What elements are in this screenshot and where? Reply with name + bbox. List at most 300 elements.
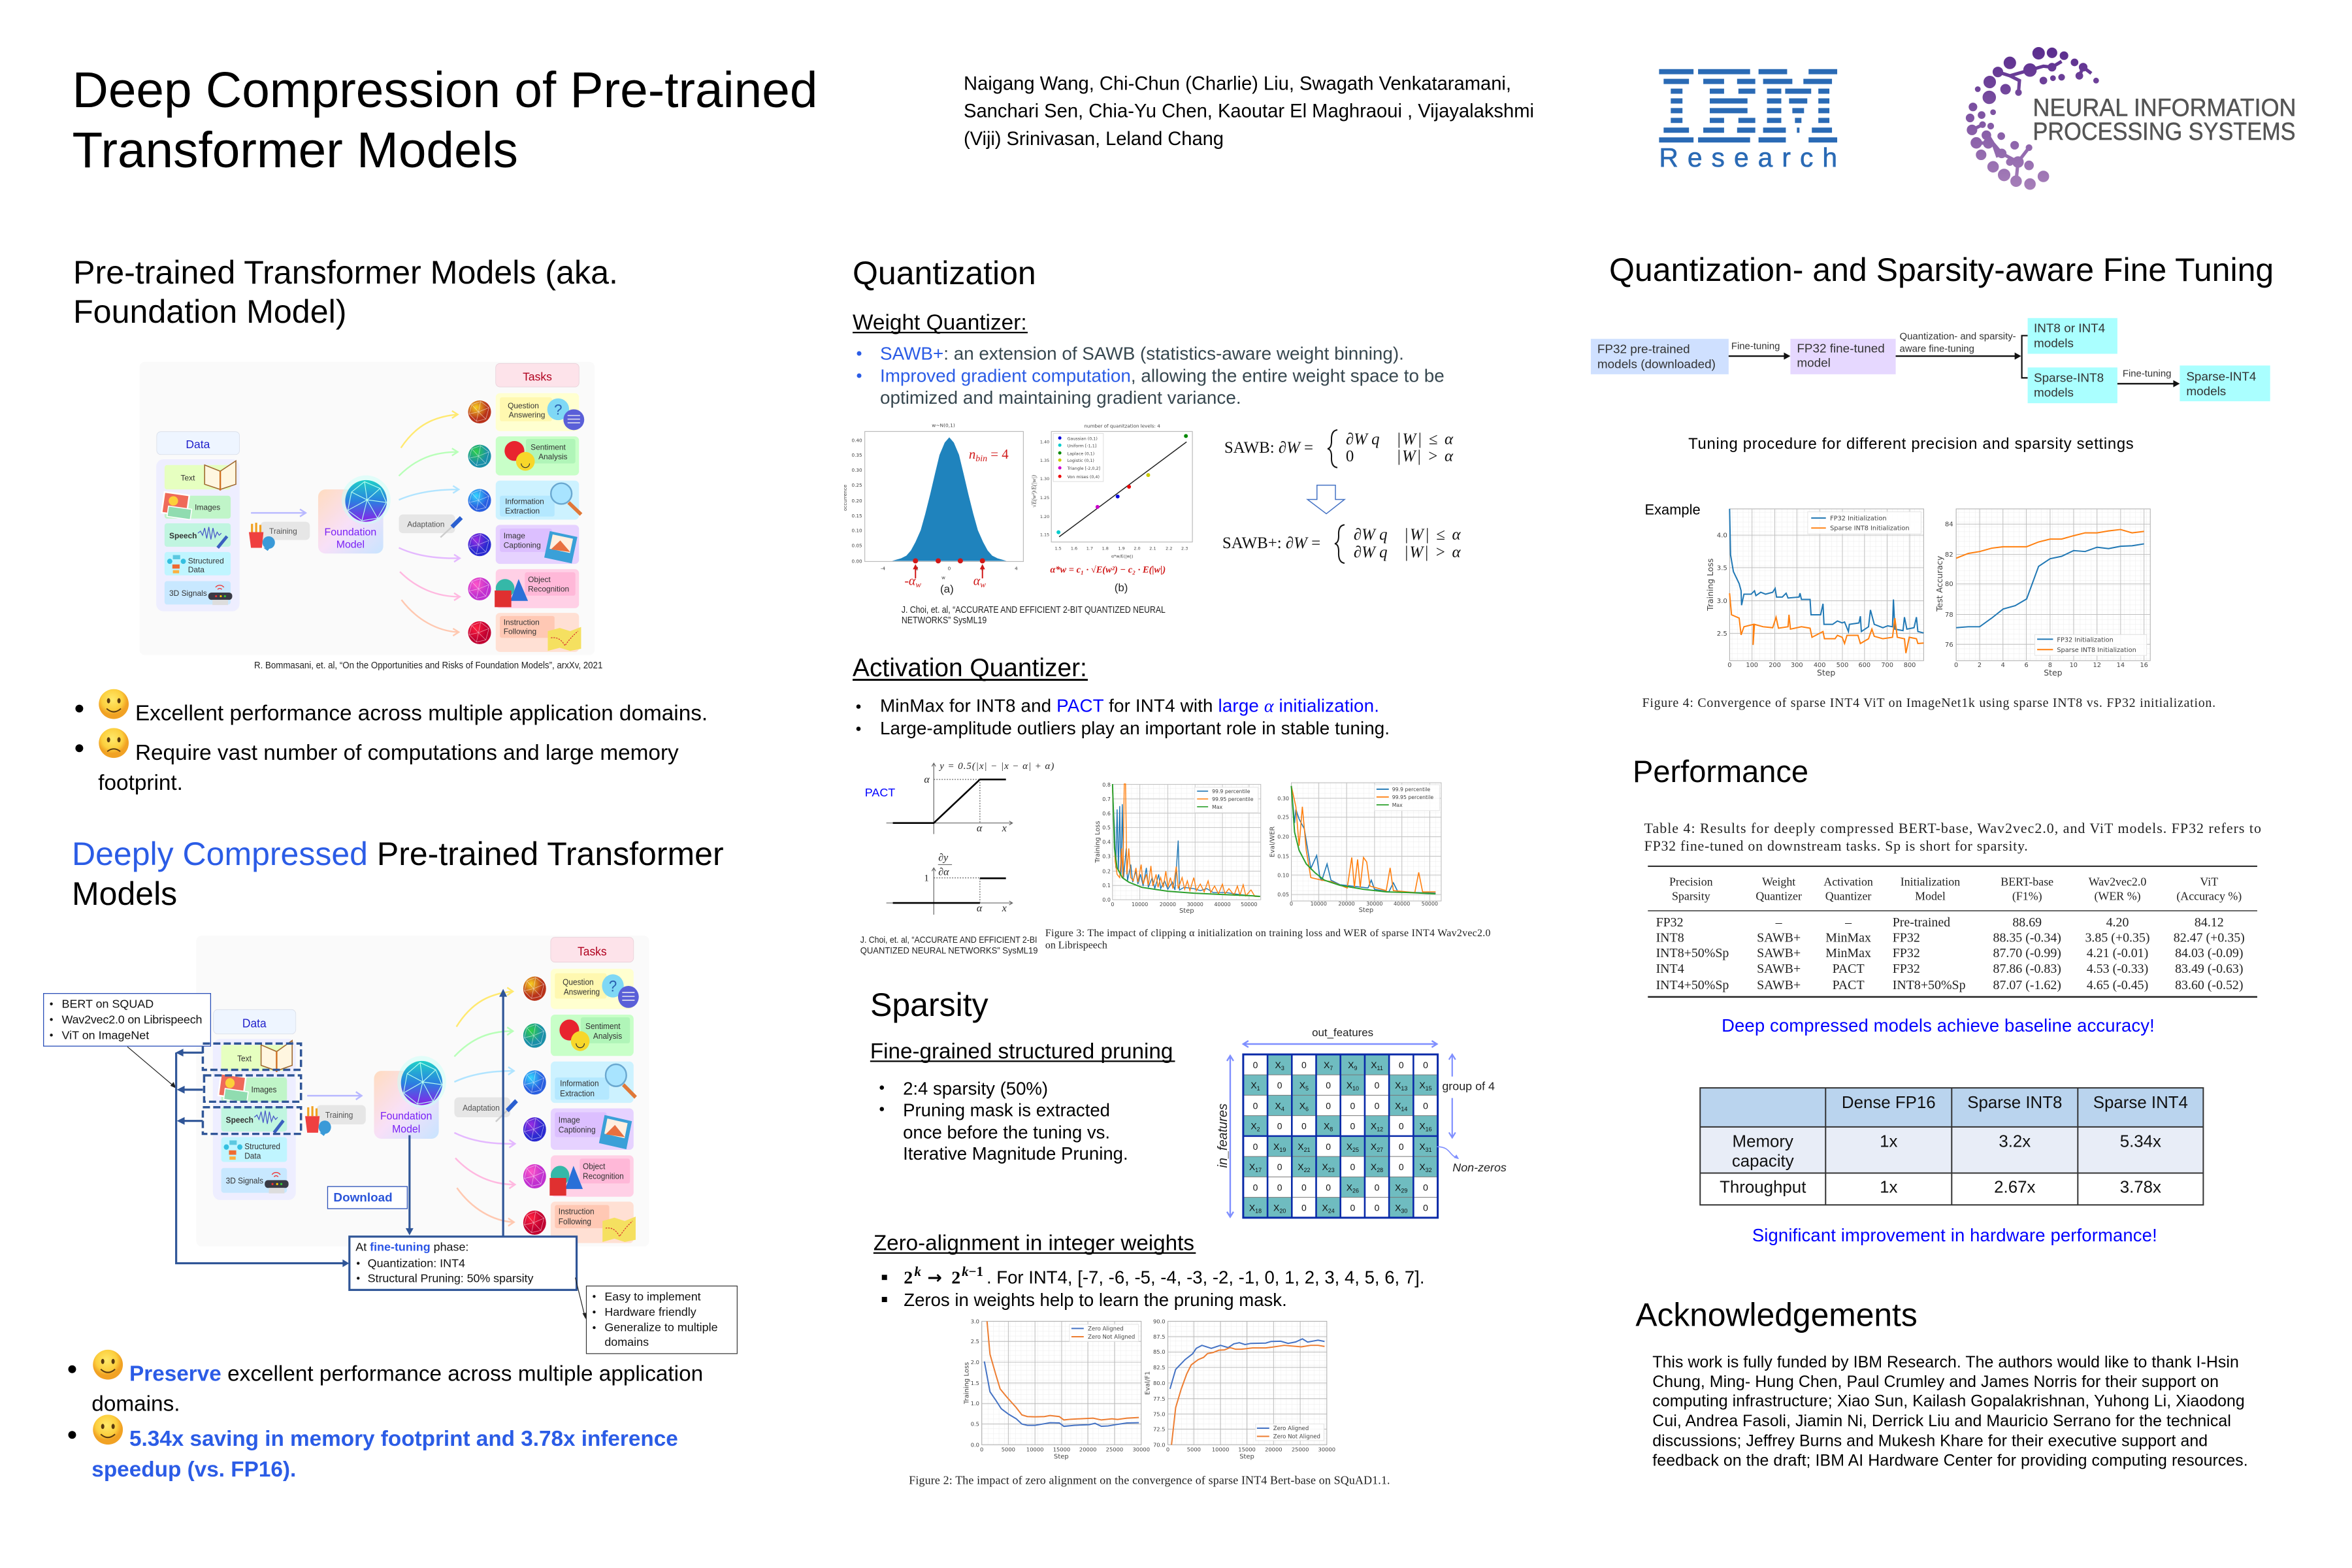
diagram: sparsity matrix: 23 (1328, 1167, 1335, 1173)
diagram: sparsity matrix: X (1250, 1121, 1257, 1132)
diagram: sparsity matrix: 21 (1304, 1147, 1311, 1153)
table: accuracy results: MinMax (1825, 946, 1871, 960)
table: accuracy results: (WER %) (2094, 890, 2141, 904)
table: accuracy results: BERT-base (2001, 875, 2053, 889)
chart: training loss vs step (clipping): 50000 (1241, 902, 1257, 907)
callout: datasets: ViT on ImageNet (62, 1028, 149, 1041)
data column: Images (252, 1085, 276, 1094)
arrow: fine-tuning: Fine-tuning (1731, 341, 1780, 352)
chart: training loss fine tuning: 400 (1814, 662, 1825, 669)
chart: training loss vs step (clipping): 0.2 (1102, 868, 1111, 874)
diagram: sparsity matrix: X (1324, 1121, 1330, 1132)
tasks column: ? (554, 401, 563, 417)
box: sparse INT8 (2028, 367, 2117, 403)
diagram: sparsity matrix: 0 (1253, 1141, 1258, 1152)
table: accuracy results: ViT (2200, 875, 2218, 889)
table: accuracy results: INT8+50%Sp (1656, 946, 1729, 960)
diagram: sparsity matrix: 16 (1426, 1126, 1432, 1133)
chart: weight histogram: 0.30 (851, 467, 862, 473)
tasks column: Extraction (505, 506, 540, 515)
chart: training loss vs step (clipping): 0.7 (1102, 796, 1111, 802)
table: accuracy results: Pre-trained (1893, 915, 1950, 930)
heading: pre-trained transformer models: Pre-trained Transformer Models (aka. (73, 254, 618, 291)
chart: test accuracy fine tuning: 2 (1978, 662, 1982, 669)
task spheres (468, 400, 491, 644)
chart: weight histogram: w (941, 574, 945, 580)
diagram: sparsity matrix: 22 (1304, 1167, 1311, 1173)
data column: Text (237, 1054, 252, 1064)
caption: table 4: FP32 fine-tuned on downstream tasks. Sp is short for sparsity. (1644, 838, 2028, 854)
chart: test accuracy fine tuning: FP32 Initialization (2057, 636, 2114, 644)
data column: Structured (244, 1142, 280, 1151)
diagram: sparsity matrix: 0 (1253, 1182, 1258, 1192)
arrows: fine-tuning flow (176, 989, 507, 1267)
foundation model block: Model (392, 1123, 420, 1135)
tasks column: Analysis (593, 1032, 622, 1041)
equation: SAWB+: |W| ≤ α (1404, 526, 1461, 544)
table: accuracy results: 4.53 (-0.33) (2087, 962, 2148, 976)
tasks column: Answering (564, 987, 600, 997)
caption: figure 3: on Librispeech (1045, 940, 1107, 951)
chart: eval F1 zero alignment: 25000 (1292, 1446, 1309, 1452)
chart: weight histogram: w (915, 580, 921, 589)
chart: eval WER vs step (clipping): 10000 (1311, 901, 1327, 907)
authors: (Viji) Srinivasan, Leland Chang (964, 129, 1224, 150)
tasks column: Image (504, 531, 525, 540)
table: accuracy results: FP32 (1656, 915, 1684, 930)
chart: training loss fine tuning: 600 (1859, 662, 1870, 669)
table: accuracy results: – (1844, 915, 1852, 930)
chart: alpha scatter: Triangle [-2,0,2] (1067, 466, 1100, 471)
arrow: fine-tuning to benefits (576, 1277, 587, 1319)
heading: pre-trained transformer models: Foundation Model) (73, 293, 346, 330)
data column: Data (188, 565, 204, 574)
chart: training loss fine tuning: FP32 Initialization (1830, 515, 1887, 522)
callout: datasets (44, 994, 210, 1046)
chart: training loss zero alignment: 5000 (1002, 1446, 1015, 1452)
chart: alpha scatter: √E(w²)/E(|w|) (1030, 475, 1037, 508)
chart: training loss zero alignment: Zero Not Aligned (1088, 1334, 1135, 1341)
chart: alpha scatter: α*w = c₁ · √E(w²) − c₂ · E(|w|) (1050, 564, 1166, 575)
diagram: PACT activation: PACT (865, 786, 895, 799)
equation: SAWB (1224, 430, 1454, 468)
tasks column: Information (560, 1079, 599, 1088)
box: FP32 pre-trained: models (downloaded) (1597, 357, 1716, 371)
chart: weight histogram: 0.25 (851, 482, 862, 488)
subheading: weight quantizer: Weight Quantizer: (853, 311, 1027, 335)
chart: training loss fine tuning: 2.5 (1717, 630, 1727, 638)
chart: eval F1 zero alignment: 72.5 (1153, 1426, 1166, 1433)
diagram: sparsity matrix: 0 (1375, 1100, 1380, 1111)
chart: eval WER vs step (clipping): 0.30 (1277, 796, 1289, 802)
chart: eval WER vs step (clipping) (1269, 783, 1441, 914)
diagram: sparsity matrix: X (1371, 1121, 1377, 1132)
diagram: sparsity matrix: X (1322, 1203, 1328, 1213)
callout: datasets: Wav2vec2.0 on Librispeech (62, 1013, 202, 1026)
text: zero-alignment bullets: . For INT4, [-7, -6, -5, -4, -3, -2, -1, 0, 1, 2, 3, 4, 5, 6, 7]. (987, 1267, 1425, 1288)
diagram: sparsity matrix: X (1371, 1060, 1377, 1070)
arrow: SAWB to SAWB+ (1307, 485, 1345, 514)
chart: eval F1 zero alignment: Zero Aligned (1273, 1426, 1309, 1432)
text: zero-alignment bullets: → (927, 1268, 942, 1288)
diagram: sparsity matrix: X (1348, 1060, 1354, 1070)
chart: alpha scatter: Logistic (0,1) (1068, 459, 1094, 463)
chart: eval F1 zero alignment: 30000 (1318, 1446, 1335, 1452)
chart: eval WER vs step (clipping): 0.10 (1277, 872, 1289, 878)
chart: training loss fine tuning: 500 (1837, 662, 1848, 669)
chart: training loss fine tuning: 100 (1746, 662, 1758, 669)
chart: training loss fine tuning: 200 (1769, 662, 1781, 669)
box: INT8 or INT4: INT8 or INT4 (2034, 322, 2105, 336)
diagram: sparsity matrix: 0 (1350, 1100, 1355, 1111)
diagram: sparsity matrix: 0 (1253, 1100, 1258, 1111)
table: hardware performance: 3.78x (2120, 1178, 2161, 1196)
adaptation step: Adaptation (463, 1103, 500, 1113)
foundation model block: Foundation (380, 1110, 432, 1122)
citation: Choi PACT: QUANTIZED NEURAL NETWORKS” SysML19 (860, 945, 1038, 956)
tasks column: Information (505, 497, 544, 506)
chart: training loss fine tuning: Step (1817, 668, 1835, 678)
diagram: sparsity matrix: X (1322, 1162, 1328, 1172)
arrow: quantization and sparsity tuning (1896, 331, 2028, 378)
callout: hardware improvement: Significant improvement in hardware performance! (1752, 1225, 2157, 1245)
tasks column: Answering (509, 410, 545, 419)
chart: training loss vs step (clipping): 0.5 (1102, 825, 1111, 831)
citation: Choi SAWB: J. Choi, et. al, “ACCURATE AND EFFICIENT 2-BIT QUANTIZED NEURAL (902, 604, 1166, 615)
diagram: sparsity matrix: 0 (1350, 1203, 1355, 1213)
chart: eval WER vs step (clipping): 40000 (1394, 901, 1410, 907)
chart: training loss vs step (clipping) (1094, 782, 1261, 915)
diagram: sparsity matrix: X (1273, 1141, 1279, 1152)
diagram: sparsity matrix: 27 (1377, 1147, 1383, 1153)
diagram: sparsity matrix: X (1419, 1141, 1426, 1152)
table: accuracy results: 4.21 (-0.01) (2087, 946, 2148, 960)
chart: test accuracy fine tuning: 12 (2093, 662, 2101, 669)
table: accuracy results: (Accuracy %) (2176, 890, 2242, 904)
text: pruning bullets: 2:4 sparsity (50%) (903, 1079, 1048, 1099)
chart: weight histogram: 2 (981, 565, 984, 571)
diagram: PACT activation: x (1002, 823, 1007, 834)
diagram: sparsity matrix: 0 (1423, 1203, 1428, 1213)
table: hardware performance: Sparse INT8 (1967, 1094, 2062, 1112)
chart: eval F1 zero alignment: 82.5 (1153, 1364, 1166, 1371)
chart: eval WER vs step (clipping): Eval/WER (1269, 826, 1277, 857)
text: acknowledgements: Cui, Andrea Fasoli, Jiamin Ni, Derrick Liu and Mauricio Serrano for the technical (1652, 1412, 2231, 1430)
chart: weight histogram: 0.15 (851, 513, 862, 519)
caption: table 4: Table 4: Results for deeply compressed BERT-base, Wav2vec2.0, and ViT models. FP32 refers to (1644, 820, 2261, 836)
table: accuracy results: FP32 (1893, 930, 1920, 945)
heading: deeply compressed models (72, 836, 724, 912)
chart: alpha scatter: 1.35 (1040, 458, 1049, 463)
diagram: sparsity matrix: 0 (1423, 1100, 1428, 1111)
training step: Training (269, 527, 297, 536)
tasks column: Following (504, 627, 536, 636)
logo: Neural Information Processing Systems (1967, 48, 2296, 189)
bullet: require vast computations (75, 728, 679, 795)
tasks column: Tasks (578, 945, 607, 958)
table: hardware performance: 2.67x (1994, 1178, 2036, 1196)
caption: figure 3: Figure 3: The impact of clipping α initialization on training loss and WER of sparse INT4 Wav2vec2.0 (1045, 928, 1491, 939)
callout: benefits: Generalize to multiple (604, 1321, 718, 1334)
chart: training loss vs step (clipping): Max (1212, 804, 1223, 810)
table: accuracy results: INT4 (1656, 962, 1684, 976)
table: accuracy results: INT8 (1656, 930, 1684, 945)
box: INT8 or INT4: models (2034, 337, 2074, 351)
caption: figure 3 (1045, 928, 1491, 951)
diagram: sparsity matrix: 8 (1330, 1126, 1333, 1133)
chart: alpha scatter: 2.3 (1181, 546, 1188, 551)
text: zero-alignment bullets: 2 (951, 1268, 960, 1288)
table: hardware performance: 3.2x (1999, 1133, 2031, 1151)
callout: fine-tuning phase: Structural Pruning: 50% sparsity (368, 1271, 533, 1284)
chart: alpha scatter: Uniform [-1,1] (1068, 444, 1096, 448)
chart: weight histogram: = 4 (987, 446, 1009, 462)
text: weight quantizer bullets: Improved gradient computation, allowing the entire weight space to be (880, 366, 1445, 385)
callout: fine-tuning phase: Quantization: INT4 (368, 1257, 465, 1270)
table: accuracy results: 83.60 (-0.52) (2175, 978, 2244, 992)
chart: training loss zero alignment: Training Loss (964, 1362, 971, 1405)
chart: training loss zero alignment: 2.0 (971, 1359, 979, 1365)
table: accuracy results: Quantizer (1825, 890, 1871, 903)
heading: quantization: Quantization (853, 255, 1036, 291)
training step: Training (325, 1111, 353, 1120)
diagram: foundation model (140, 362, 595, 655)
chart: eval F1 zero alignment: 10000 (1212, 1446, 1229, 1452)
chart: eval WER vs step (clipping): 20000 (1338, 901, 1355, 907)
logo: Neural Information Processing Systems: NEURAL INFORMATION (2033, 94, 2296, 122)
diagram: compressed foundation model (196, 936, 649, 1247)
diagram: sparsity matrix: 10 (1352, 1085, 1359, 1092)
chart: eval F1 zero alignment: Step (1239, 1453, 1254, 1460)
chart: training loss vs step (clipping): 0.3 (1102, 853, 1111, 859)
chart: test accuracy fine tuning: 80 (1945, 581, 1953, 588)
text: zero-alignment bullets (882, 1264, 1425, 1310)
chart: training loss vs step (clipping): 0.6 (1102, 811, 1111, 817)
table: hardware performance: 1x (1880, 1178, 1898, 1196)
chart: training loss vs step (clipping): 99.9 percentile (1212, 789, 1250, 794)
chart: eval WER vs step (clipping): 99.95 percentile (1392, 794, 1433, 800)
diagram: sparsity matrix: X (1298, 1162, 1304, 1172)
diagram: sparsity matrix: 0 (1326, 1100, 1331, 1111)
table: accuracy results: INT4+50%Sp (1656, 978, 1729, 992)
tasks column: Captioning (504, 540, 541, 549)
diagram: sparsity matrix: 0 (1301, 1060, 1307, 1070)
chart: training loss zero alignment (964, 1318, 1150, 1460)
tasks column: Object (528, 575, 551, 584)
table: accuracy results: 87.86 (-0.83) (1993, 962, 2061, 976)
text: acknowledgements: Chung, Ming- Hung Chen, Paul Crumley and James Norris for their support on (1652, 1373, 2219, 1391)
chart: weight histogram: bin (975, 454, 987, 464)
chart: test accuracy fine tuning: 4 (2001, 662, 2005, 669)
text: activation quantizer bullets: MinMax for INT8 and PACT for INT4 with large α initialization. (880, 695, 1379, 716)
bullet: memory and speed savings (68, 1414, 678, 1482)
chart: test accuracy fine tuning: Sparse INT8 Initialization (2057, 647, 2136, 654)
diagram: PACT activation: x (1002, 903, 1007, 914)
adaptation step: Adaptation (407, 520, 444, 529)
tasks column: Instruction (504, 617, 540, 627)
diagram: sparsity matrix: 0 (1301, 1203, 1307, 1213)
chart: eval WER vs step (clipping): 0 (1290, 901, 1293, 907)
chart: training loss zero alignment: 30000 (1132, 1446, 1150, 1452)
diagram: sparsity matrix: 17 (1255, 1167, 1262, 1173)
diagram: sparsity matrix: 0 (1326, 1080, 1331, 1090)
heading: acknowledgements: Acknowledgements (1635, 1296, 1918, 1333)
chart: training loss vs step (clipping): 30000 (1187, 902, 1203, 907)
chart: eval F1 zero alignment: 5000 (1187, 1446, 1201, 1452)
diagram: sparsity matrix: 1 (1257, 1085, 1260, 1092)
chart: test accuracy fine tuning: 10 (2070, 662, 2078, 669)
table: accuracy results: FP32 (1893, 962, 1920, 976)
chart: test accuracy fine tuning: 16 (2140, 662, 2148, 669)
foundation model block (318, 476, 391, 553)
table: accuracy results: Model (1915, 890, 1946, 903)
title (72, 63, 817, 178)
chart: test accuracy fine tuning: 0 (1954, 662, 1958, 669)
diagram: sparsity matrix: 11 (1377, 1065, 1383, 1071)
caption: tuning procedure: Tuning procedure for different precision and sparsity settings (1688, 435, 2134, 453)
citation: Bommasani: R. Bommasani, et. al, “On the Opportunities and Risks of Foundation Models”, arxXv, 2021 (254, 660, 602, 671)
diagram: sparsity matrix: 0 (1253, 1060, 1258, 1070)
diagram: sparsity matrix: X (1395, 1080, 1401, 1090)
diagram: sparsity matrix: X (1395, 1203, 1401, 1213)
data column (156, 432, 240, 612)
text: acknowledgements: feedback on the draft; IBM AI Hardware Center for providing computing resources. (1652, 1451, 2248, 1469)
tasks column: Question (508, 401, 539, 410)
diagram: sparsity matrix: out_features (1312, 1026, 1373, 1039)
diagram: sparsity matrix: X (1347, 1141, 1352, 1152)
chart: training loss vs step (clipping): Training Loss (1094, 821, 1102, 864)
chart: alpha scatter: 1.20 (1040, 514, 1049, 519)
chart: training loss zero alignment: 10000 (1026, 1446, 1043, 1452)
table: accuracy results: FP32 (1893, 946, 1920, 960)
text: pruning bullets: Iterative Magnitude Pruning. (903, 1143, 1128, 1164)
tasks column: Following (559, 1217, 591, 1226)
diagram: sparsity matrix: X (1419, 1080, 1426, 1090)
chart: training loss zero alignment: 0.5 (971, 1421, 979, 1428)
diagram: sparsity matrix: X (1347, 1080, 1352, 1090)
table: accuracy results: Weight (1762, 875, 1795, 889)
caption: figure 4: Figure 4: Convergence of sparse INT4 ViT on ImageNet1k using sparse INT8 vs. FP32 initialization. (1642, 696, 2215, 710)
citation: Choi PACT (860, 934, 1038, 956)
callout: fine-tuning phase (350, 1237, 577, 1290)
diagram: sparsity matrix: 0 (1399, 1060, 1404, 1070)
diagram: sparsity matrix: X (1299, 1100, 1305, 1111)
chart: eval WER vs step (clipping): 0.05 (1277, 892, 1289, 898)
table: accuracy results: Precision (1669, 875, 1713, 889)
tasks column: Image (559, 1115, 580, 1125)
table: accuracy results: 4.20 (2106, 915, 2129, 930)
tasks column: Analysis (538, 452, 568, 461)
foundation model block: Foundation (325, 527, 376, 538)
chart: alpha scatter: α*w/E(|w|) (1111, 553, 1133, 559)
bullet: preserve performance: Preserve excellent performance across multiple application (129, 1362, 703, 1386)
diagram: sparsity matrix: 0 (1375, 1182, 1380, 1192)
diagram: sparsity matrix: 19 (1279, 1147, 1286, 1153)
table: accuracy results: Quantizer (1756, 890, 1802, 903)
chart: test accuracy fine tuning: 76 (1945, 642, 1953, 649)
equation: SAWB: 0 (1346, 448, 1354, 465)
tasks column: Instruction (559, 1207, 595, 1217)
chart: training loss fine tuning: 300 (1791, 662, 1803, 669)
chart: test accuracy fine tuning: Test Accuracy (1935, 556, 1944, 612)
chart: test accuracy fine tuning: 6 (2024, 662, 2029, 669)
chart: weight histogram: -2 (914, 565, 919, 571)
logo: Neural Information Processing Systems: PROCESSING SYSTEMS (2033, 118, 2296, 146)
chart: alpha scatter: 1.5 (1055, 546, 1062, 551)
diagram: sparsity matrix: 3 (1281, 1065, 1284, 1071)
authors (964, 73, 1534, 150)
chart: training loss zero alignment: 0 (980, 1446, 983, 1452)
equation: SAWB: ∂W q (1346, 431, 1380, 448)
subheading: zero-alignment: Zero-alignment in integer weights (874, 1231, 1194, 1255)
chart: training loss vs step (clipping): 0.1 (1102, 883, 1111, 889)
caption: figure 2: Figure 2: The impact of zero alignment on the convergence of sparse INT4 Bert-base on SQuAD1.1. (909, 1474, 1390, 1487)
text: activation quantizer bullets: Large-amplitude outliers play an important role in stable tuning. (880, 718, 1390, 738)
tasks column: Tasks (523, 370, 552, 384)
bullet: excellent performance (75, 689, 708, 725)
table: accuracy results: 82.47 (+0.35) (2174, 930, 2245, 945)
logo: IBM Research (1659, 72, 1837, 172)
table: hardware performance: Throughput (1720, 1178, 1806, 1196)
label: download (327, 1186, 407, 1209)
callout: fine-tuning phase: At fine-tuning phase: (355, 1241, 468, 1254)
chart: alpha scatter: 1.9 (1119, 546, 1125, 551)
tasks column: Sentiment (585, 1022, 621, 1031)
chart: eval F1 zero alignment: 70.0 (1153, 1441, 1166, 1448)
chart: training loss vs step (clipping): 99.95 percentile (1212, 796, 1254, 802)
chart: training loss zero alignment: 0.0 (971, 1441, 979, 1448)
chart: alpha scatter: (b) (1115, 581, 1128, 594)
chart: test accuracy fine tuning: 14 (2117, 662, 2125, 669)
table: accuracy results: 84.12 (2195, 915, 2224, 930)
chart: training loss fine tuning: 700 (1881, 662, 1893, 669)
table: accuracy results: PACT (1833, 978, 1865, 992)
diagram: sparsity matrix: 0 (1350, 1162, 1355, 1172)
arrow: quantization and sparsity tuning: Quantization- and sparsity- (1900, 331, 2016, 342)
citation: Choi SAWB: NETWORKS” SysML19 (902, 615, 987, 626)
diagram: sparsity matrix: 0 (1399, 1162, 1404, 1172)
chart: eval WER vs step (clipping): 30000 (1366, 901, 1383, 907)
text: acknowledgements: computing infrastructure; Xiao Sun, Kailash Gopalakrishnan, Yuhong Li, Xiaodong (1652, 1392, 2245, 1411)
chart: eval WER vs step (clipping): 0.15 (1277, 853, 1289, 859)
chart: training loss vs step (clipping): 0.0 (1102, 897, 1111, 903)
diagram: sparsity matrix: X (1395, 1182, 1401, 1192)
chart: training loss fine tuning: 3.5 (1717, 564, 1727, 572)
citation: Choi SAWB (902, 604, 1166, 626)
diagram: PACT activation: α (924, 774, 930, 785)
chart: training loss zero alignment: 1.5 (971, 1380, 979, 1386)
diagram: sparsity matrix: in_features (1216, 1103, 1230, 1168)
chart: weight histogram (842, 422, 1023, 595)
text: acknowledgements: This work is fully funded by IBM Research. The authors would like to thank I-Hsin (1652, 1353, 2239, 1371)
bullet: memory and speed savings: speedup (vs. FP16). (91, 1458, 296, 1482)
table: accuracy results (1648, 866, 2257, 997)
table: accuracy results: (F1%) (2012, 890, 2042, 904)
diagram: sparsity matrix: 5 (1305, 1085, 1309, 1092)
diagram: sparsity matrix: X (1371, 1141, 1377, 1152)
equation: SAWB: |W| ≤ α (1397, 431, 1454, 448)
chart: alpha scatter: number of quanitzation levels: 4 (1085, 423, 1160, 429)
task spheres (523, 977, 546, 1235)
chart: training loss fine tuning: Training Loss (1705, 559, 1715, 612)
diagram: sparsity matrix: 29 (1401, 1187, 1407, 1194)
icon: frowning face (99, 728, 129, 758)
diagram: sparsity matrix: 0 (1277, 1080, 1282, 1090)
box: FP32 pre-trained: FP32 pre-trained (1597, 343, 1690, 357)
chart: alpha scatter: 1.8 (1102, 546, 1109, 551)
box: FP32 fine-tuned: FP32 fine-tuned (1797, 342, 1885, 356)
caption: table 4 (1644, 820, 2261, 854)
